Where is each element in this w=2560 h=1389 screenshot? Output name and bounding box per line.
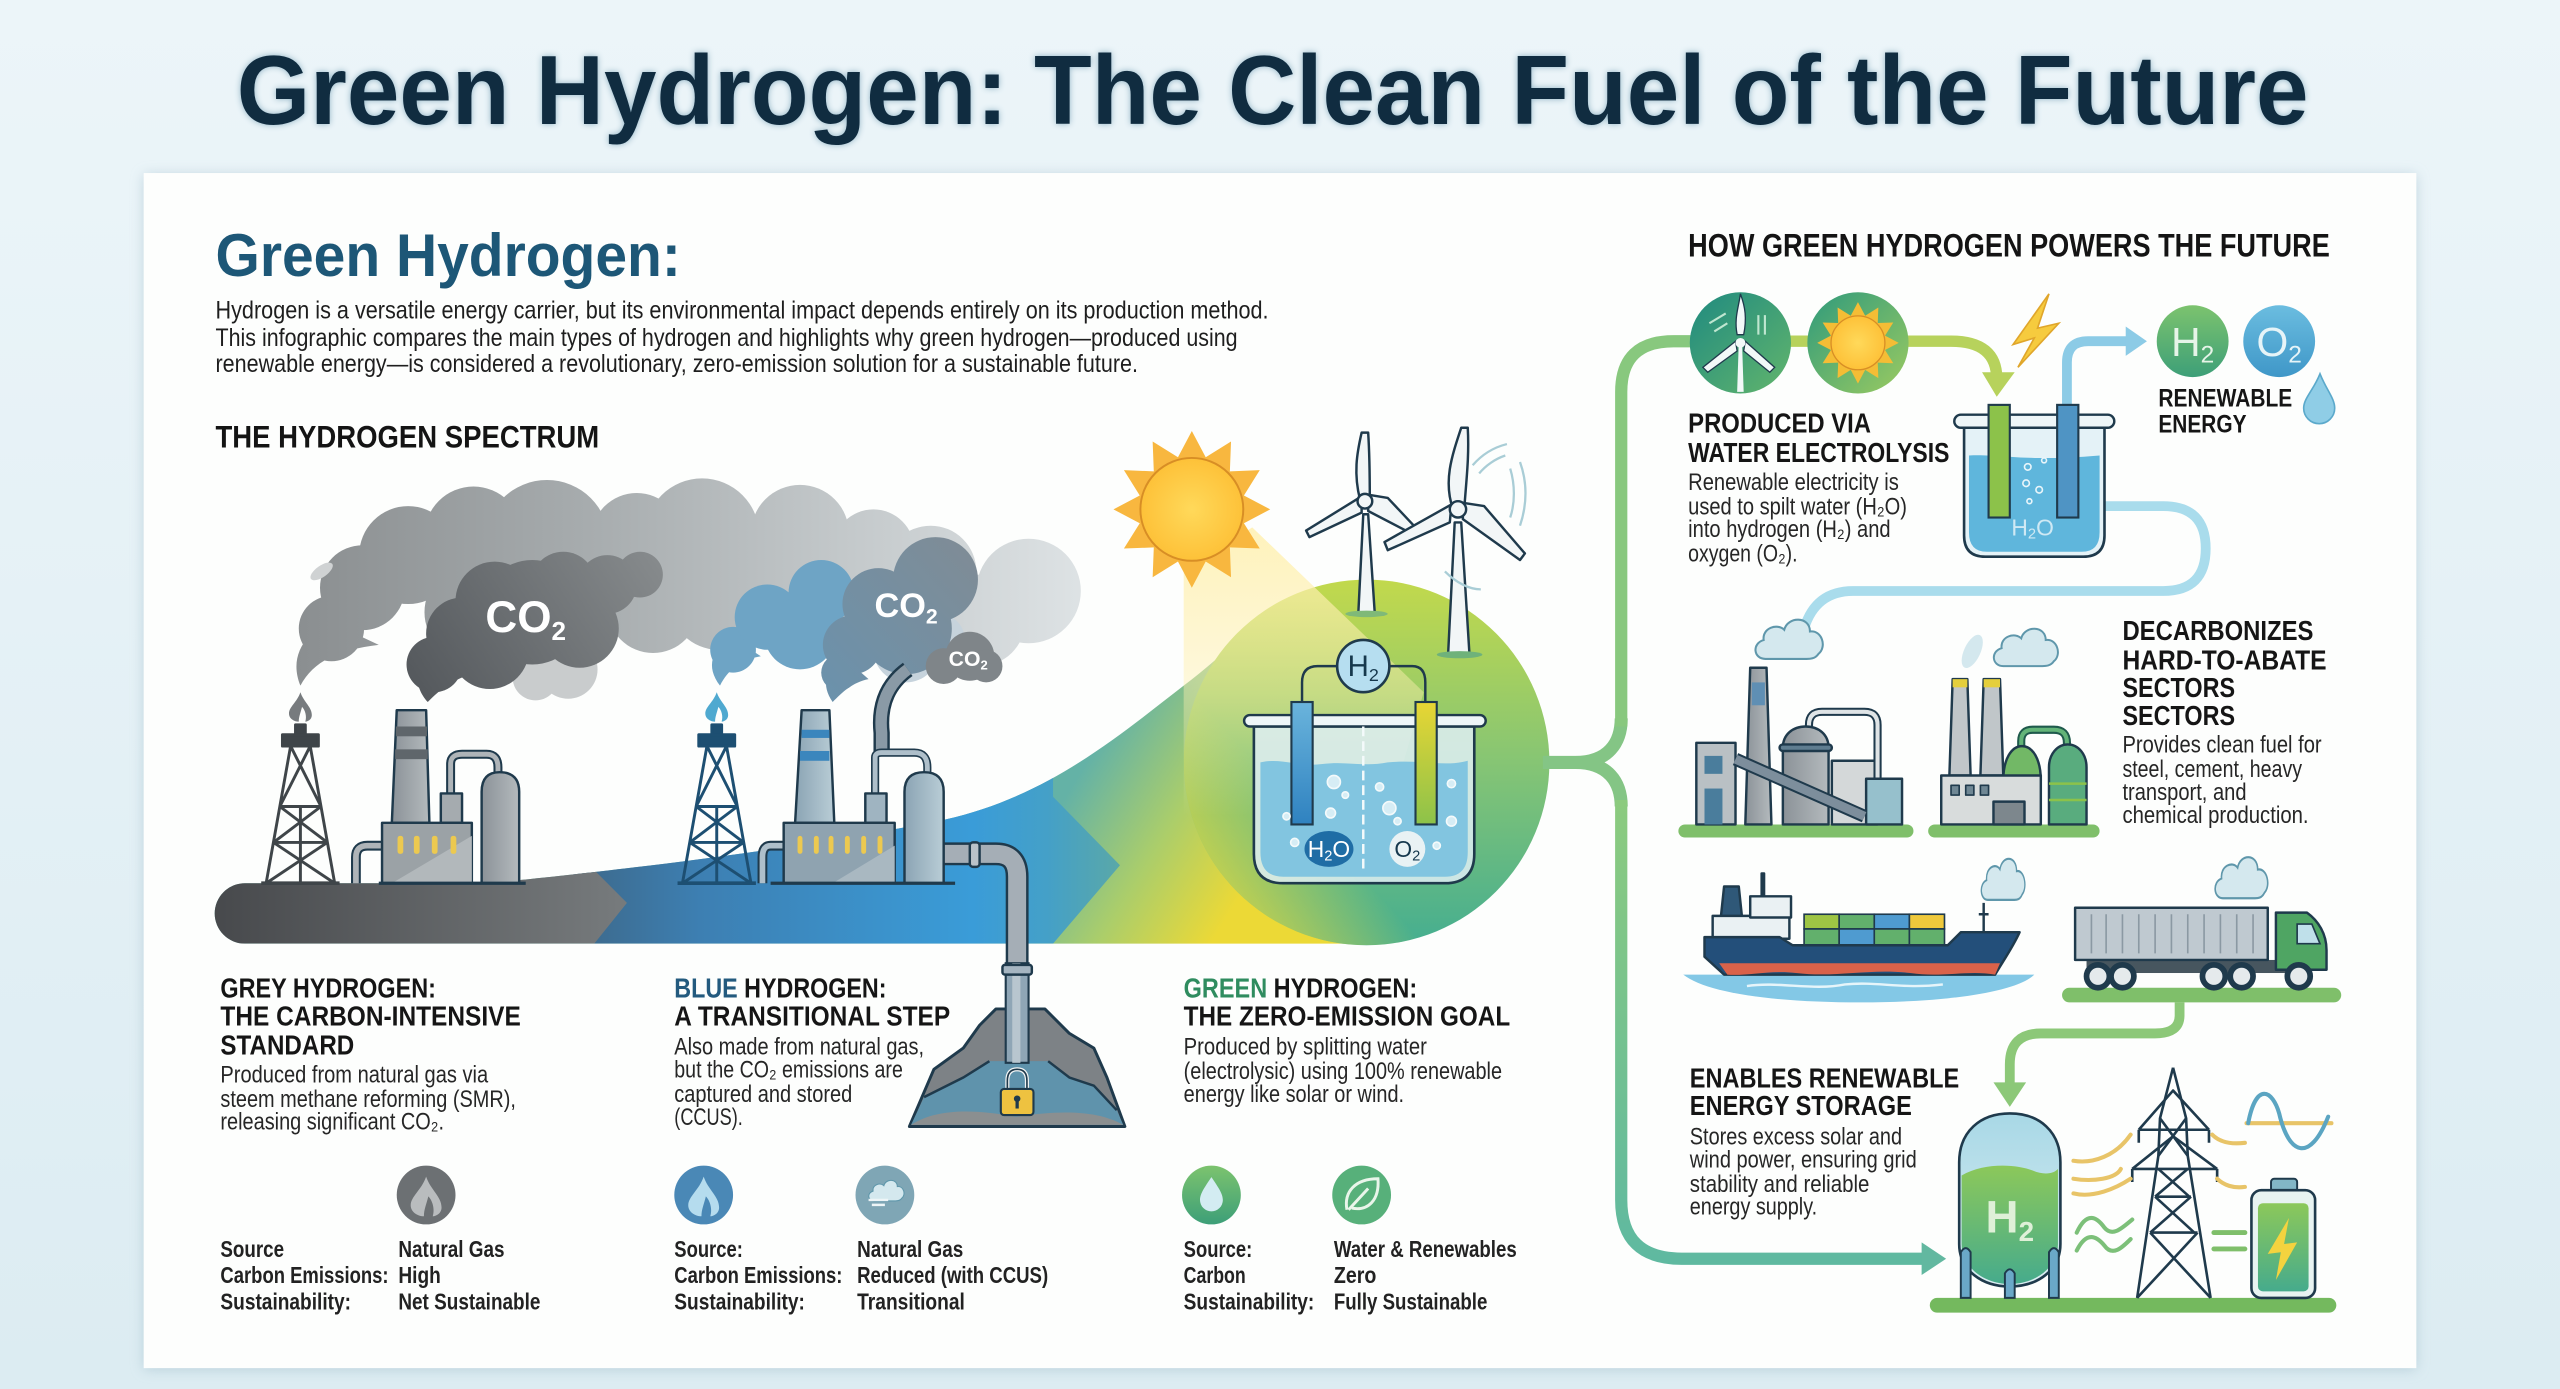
rim — [1244, 715, 1486, 726]
icon: H2 badge: H — [2171, 319, 2201, 365]
decarbonizes text: chemical production. — [2122, 803, 2309, 829]
smoke clouds — [1957, 629, 2058, 671]
decarbonizes text: SECTORS — [2122, 672, 2235, 703]
transmission tower — [2132, 1068, 2217, 1298]
industry: steel plant — [1678, 620, 1913, 838]
orb connector — [1543, 718, 1621, 806]
table: Carbon Emissions: — [220, 1262, 389, 1288]
derrick grey — [261, 725, 340, 883]
building with lights — [382, 823, 472, 883]
intro text — [216, 296, 1269, 378]
ground — [2062, 988, 2341, 1002]
table: Transitional — [857, 1288, 965, 1314]
green tanks — [2003, 744, 2087, 824]
label CO2 small: CO — [949, 648, 980, 671]
chimney — [795, 710, 834, 823]
decarbonizes text: Provides clean fuel for — [2122, 733, 2322, 759]
arrow: outputs — [2067, 327, 2147, 408]
pipes — [875, 753, 927, 793]
industry: chemical plant — [1928, 629, 2100, 838]
enables text: wind power, ensuring grid — [1689, 1147, 1917, 1173]
decarbonizes text: SECTORS — [2122, 700, 2235, 731]
small CO2 cloud — [926, 632, 1002, 684]
produced via text — [1688, 408, 1949, 568]
grey segment — [214, 872, 627, 944]
icon: container ship — [1683, 859, 2034, 1002]
main panel background — [144, 173, 2416, 1368]
small electrolyser: H — [2011, 514, 2028, 540]
table: Source: — [674, 1236, 743, 1262]
H2O badge: 2 — [1324, 848, 1332, 864]
label CO2 large: 2 — [552, 616, 566, 646]
heading: A TRANSITIONAL STEP — [674, 1000, 950, 1031]
icon: truck — [2062, 857, 2341, 1002]
building with lights — [784, 823, 895, 883]
icon: O2 badge: O — [2257, 319, 2288, 365]
description: captured and stored — [674, 1082, 852, 1108]
blue hydrogen plant — [678, 669, 1017, 980]
description: releasing significant CO₂. — [220, 1110, 444, 1136]
enables text: ENABLES RENEWABLE — [1690, 1062, 1959, 1093]
renewable energy label — [2158, 385, 2292, 439]
vertical storage pipe — [1006, 963, 1029, 1063]
intro text: Hydrogen is a versatile energy carrier, but its environmental impact depends entirely on its production method. — [216, 296, 1269, 324]
heading: GREY HYDROGEN: — [220, 973, 436, 1004]
underground storage mound — [909, 963, 1125, 1126]
icon: sun badge — [1807, 292, 1909, 393]
tank — [904, 772, 944, 883]
produced via text: PRODUCED VIA — [1688, 408, 1871, 439]
table: Sustainability: — [1184, 1288, 1314, 1314]
arrow: trunk up to produced section — [1621, 341, 1698, 726]
dome tank — [1780, 726, 1832, 824]
wind arcs — [1445, 444, 1526, 589]
icon: O2 badge — [2243, 305, 2315, 377]
description: (electrolysic) using 100% renewable — [1184, 1059, 1502, 1085]
electrodes — [1291, 702, 1313, 824]
panel: green hydrogen — [1182, 973, 1517, 1314]
arrow: trunk down to storage — [1621, 800, 1946, 1275]
water — [1260, 761, 1468, 877]
hydrogen storage tank: H — [1986, 1192, 2019, 1243]
chassis — [2087, 960, 2299, 973]
electrolysis cell — [1244, 640, 1486, 883]
decarbonizes text — [2122, 615, 2327, 829]
pipe — [1809, 712, 1878, 780]
table: Water & Renewables — [1334, 1236, 1517, 1262]
hull — [1704, 932, 2020, 975]
storage pipe upper — [940, 854, 1017, 980]
description: Produced by splitting water — [1184, 1035, 1427, 1061]
blue segment — [572, 778, 1120, 944]
table: Fully Sustainable — [1334, 1288, 1487, 1314]
description: (CCUS). — [674, 1105, 743, 1131]
turbine right — [1384, 428, 1525, 658]
enables text: energy supply. — [1690, 1195, 1817, 1221]
H2O badge: O — [1332, 836, 1350, 862]
tank — [482, 772, 519, 883]
description: but the CO₂ emissions are — [674, 1058, 903, 1084]
wisp — [308, 559, 336, 584]
light smoke blob — [513, 640, 598, 700]
table — [674, 1236, 1048, 1314]
table: Zero — [1334, 1262, 1376, 1288]
heading — [674, 973, 950, 1031]
storage ground — [1930, 1298, 2336, 1313]
table: Carbon Emissions: — [674, 1262, 842, 1288]
smoke cloud — [1755, 620, 1823, 659]
hydrogen storage tank — [1959, 1113, 2060, 1298]
produced via text: used to spilt water (H₂O) — [1688, 494, 1907, 520]
heading — [220, 973, 521, 1061]
description: energy like solar or wind. — [1184, 1082, 1404, 1108]
large background smoke — [296, 478, 1081, 686]
enables text — [1689, 1062, 1959, 1221]
green energy orb — [1184, 580, 1549, 945]
table: Sustainability: — [674, 1288, 805, 1314]
trailer — [2075, 908, 2268, 960]
label CO2 medium: CO — [875, 587, 926, 625]
wheels — [2087, 965, 2310, 988]
membrane — [1362, 726, 1364, 869]
heading — [1184, 973, 1510, 1031]
O2 badge: O — [1394, 836, 1412, 862]
building — [1941, 775, 2041, 824]
intro text: renewable energy—is considered a revolutionary, zero-emission solution for a sustainable future. — [216, 350, 1138, 378]
hydrogen storage tank: 2 — [2019, 1216, 2034, 1247]
arrow: truck to storage — [1993, 1002, 2180, 1107]
ground — [1678, 824, 1913, 838]
superstructure — [1713, 873, 1791, 939]
H2 badge — [1337, 640, 1389, 692]
icon: natural gas flame — [397, 1166, 456, 1224]
produced via text: Renewable electricity is — [1688, 470, 1899, 496]
heading: GREEN HYDROGEN: — [1184, 973, 1417, 1004]
icon: sun — [1113, 431, 1270, 588]
table: Natural Gas — [398, 1236, 504, 1262]
icon: lightning — [2013, 294, 2059, 367]
enables text: Stores excess solar and — [1690, 1124, 1902, 1150]
small box — [441, 793, 462, 823]
power waves — [2073, 1094, 2331, 1251]
icon: water drop — [1182, 1166, 1241, 1224]
description — [674, 1035, 924, 1131]
wires — [1302, 666, 1425, 702]
back box — [1832, 761, 1878, 824]
table: Source: — [1184, 1236, 1252, 1262]
flame grey — [289, 692, 312, 722]
pale smoke behind capture pipe — [873, 614, 965, 682]
table: Reduced (with CCUS) — [857, 1262, 1048, 1288]
description — [220, 1062, 516, 1136]
decarbonizes text: HARD-TO-ABATE — [2122, 644, 2327, 675]
heading: THE ZERO-EMISSION GOAL — [1184, 1000, 1510, 1031]
flame blue — [705, 692, 728, 722]
heading: BLUE HYDROGEN: — [674, 973, 887, 1004]
chimney — [1745, 668, 1771, 824]
arrow: lime to electrolyser — [1780, 341, 2015, 397]
produced via text: into hydrogen (H₂) and — [1688, 517, 1891, 543]
arrow: blue winding flow — [1804, 506, 2206, 629]
decarbonizes text: steel, cement, heavy — [2122, 757, 2302, 783]
small electrolyser — [1954, 405, 2114, 557]
capture pipe — [881, 669, 908, 754]
turbine left — [1306, 433, 1414, 617]
H2O badge — [1304, 831, 1353, 867]
pipes — [451, 754, 498, 793]
cab — [2276, 913, 2327, 970]
icon: padlock — [1001, 1069, 1033, 1115]
water — [1683, 975, 2034, 1002]
dark smoke with CO2 — [407, 552, 663, 702]
table — [220, 1236, 540, 1314]
table: Net Sustainable — [398, 1288, 540, 1314]
table: Source — [220, 1236, 284, 1262]
produced via text: WATER ELECTROLYSIS — [1688, 437, 1949, 468]
derrick blue — [678, 725, 756, 883]
grey hydrogen plant — [261, 692, 526, 883]
pipe flange — [970, 842, 980, 867]
box — [1866, 779, 1902, 824]
decarbonizes text: transport, and — [2122, 780, 2247, 806]
green pipe — [2021, 730, 2067, 751]
O2 badge: 2 — [1412, 848, 1420, 864]
H2O badge: H — [1308, 836, 1324, 862]
description: steem methane reforming (SMR), — [220, 1087, 516, 1113]
grey-blue smoke with CO2 — [821, 537, 978, 702]
small electrolyser: O — [2036, 514, 2054, 540]
chimney — [392, 710, 429, 823]
spectrum band — [214, 660, 1344, 944]
O2 badge — [1389, 831, 1425, 867]
bubbles — [1283, 775, 1456, 849]
produced via text: oxygen (O₂). — [1688, 542, 1798, 568]
icon: wind — [1690, 292, 1791, 393]
decarbonizes text: DECARBONIZES — [2122, 615, 2313, 646]
small electrolyser: 2 — [2028, 527, 2036, 543]
chimneys — [1949, 679, 2003, 775]
ground — [1928, 824, 2100, 838]
icon: battery — [2251, 1179, 2315, 1298]
icon: H2 badge: 2 — [2201, 341, 2214, 368]
bow mast — [1979, 903, 1989, 932]
panel: grey hydrogen — [220, 973, 540, 1314]
right column heading: HOW GREEN HYDROGEN POWERS THE FUTURE — [1688, 226, 2330, 263]
icon: leaf — [1332, 1166, 1391, 1224]
heading: STANDARD — [220, 1030, 354, 1061]
renewable energy label: RENEWABLE — [2158, 385, 2292, 413]
vertical pipe flange — [1002, 965, 1032, 975]
panel: blue hydrogen — [674, 973, 1048, 1314]
building — [1696, 743, 1736, 824]
table: Carbon — [1184, 1262, 1246, 1288]
description — [1184, 1035, 1502, 1108]
wind turbines — [1306, 428, 1526, 658]
containers — [1804, 914, 1944, 945]
beaker glass — [1254, 726, 1474, 883]
description: Also made from natural gas, — [674, 1035, 924, 1061]
heading: THE CARBON-INTENSIVE — [220, 1000, 521, 1031]
icon: captured emissions — [856, 1166, 914, 1224]
enables text: ENERGY STORAGE — [1690, 1090, 1912, 1121]
smoke cloud — [1981, 859, 2025, 900]
table: High — [398, 1262, 441, 1288]
icon: H2 badge — [2157, 305, 2229, 377]
small box — [865, 793, 887, 823]
icon: O2 badge: 2 — [2288, 341, 2302, 368]
smoke clouds — [296, 478, 1081, 702]
icon: blue flame — [674, 1166, 733, 1224]
label CO2 small: 2 — [980, 657, 988, 672]
conveyor — [1736, 759, 1864, 816]
sun ray beam — [1184, 527, 1424, 816]
title: Green Hydrogen: The Clean Fuel of the Future — [237, 35, 2309, 145]
table: Sustainability: — [220, 1288, 351, 1314]
renewable energy label: ENERGY — [2158, 411, 2247, 439]
H2 badge: H — [1348, 650, 1369, 683]
label CO2 large: CO — [485, 593, 552, 642]
spectrum heading: THE HYDROGEN SPECTRUM — [216, 418, 599, 454]
table — [1184, 1236, 1517, 1314]
smoke cloud — [2215, 857, 2268, 898]
description: Produced from natural gas via — [220, 1062, 489, 1088]
intro text: This infographic compares the main types of hydrogen and highlights why green hydrogen—produced using — [216, 324, 1238, 352]
enables text: stability and reliable — [1690, 1172, 1869, 1198]
intro heading: Green Hydrogen: — [216, 221, 681, 289]
blue smoke — [710, 560, 854, 686]
table: Natural Gas — [857, 1236, 963, 1262]
label CO2 medium: 2 — [926, 606, 938, 629]
H2 badge: 2 — [1369, 665, 1379, 685]
icon: drop — [2304, 374, 2335, 424]
